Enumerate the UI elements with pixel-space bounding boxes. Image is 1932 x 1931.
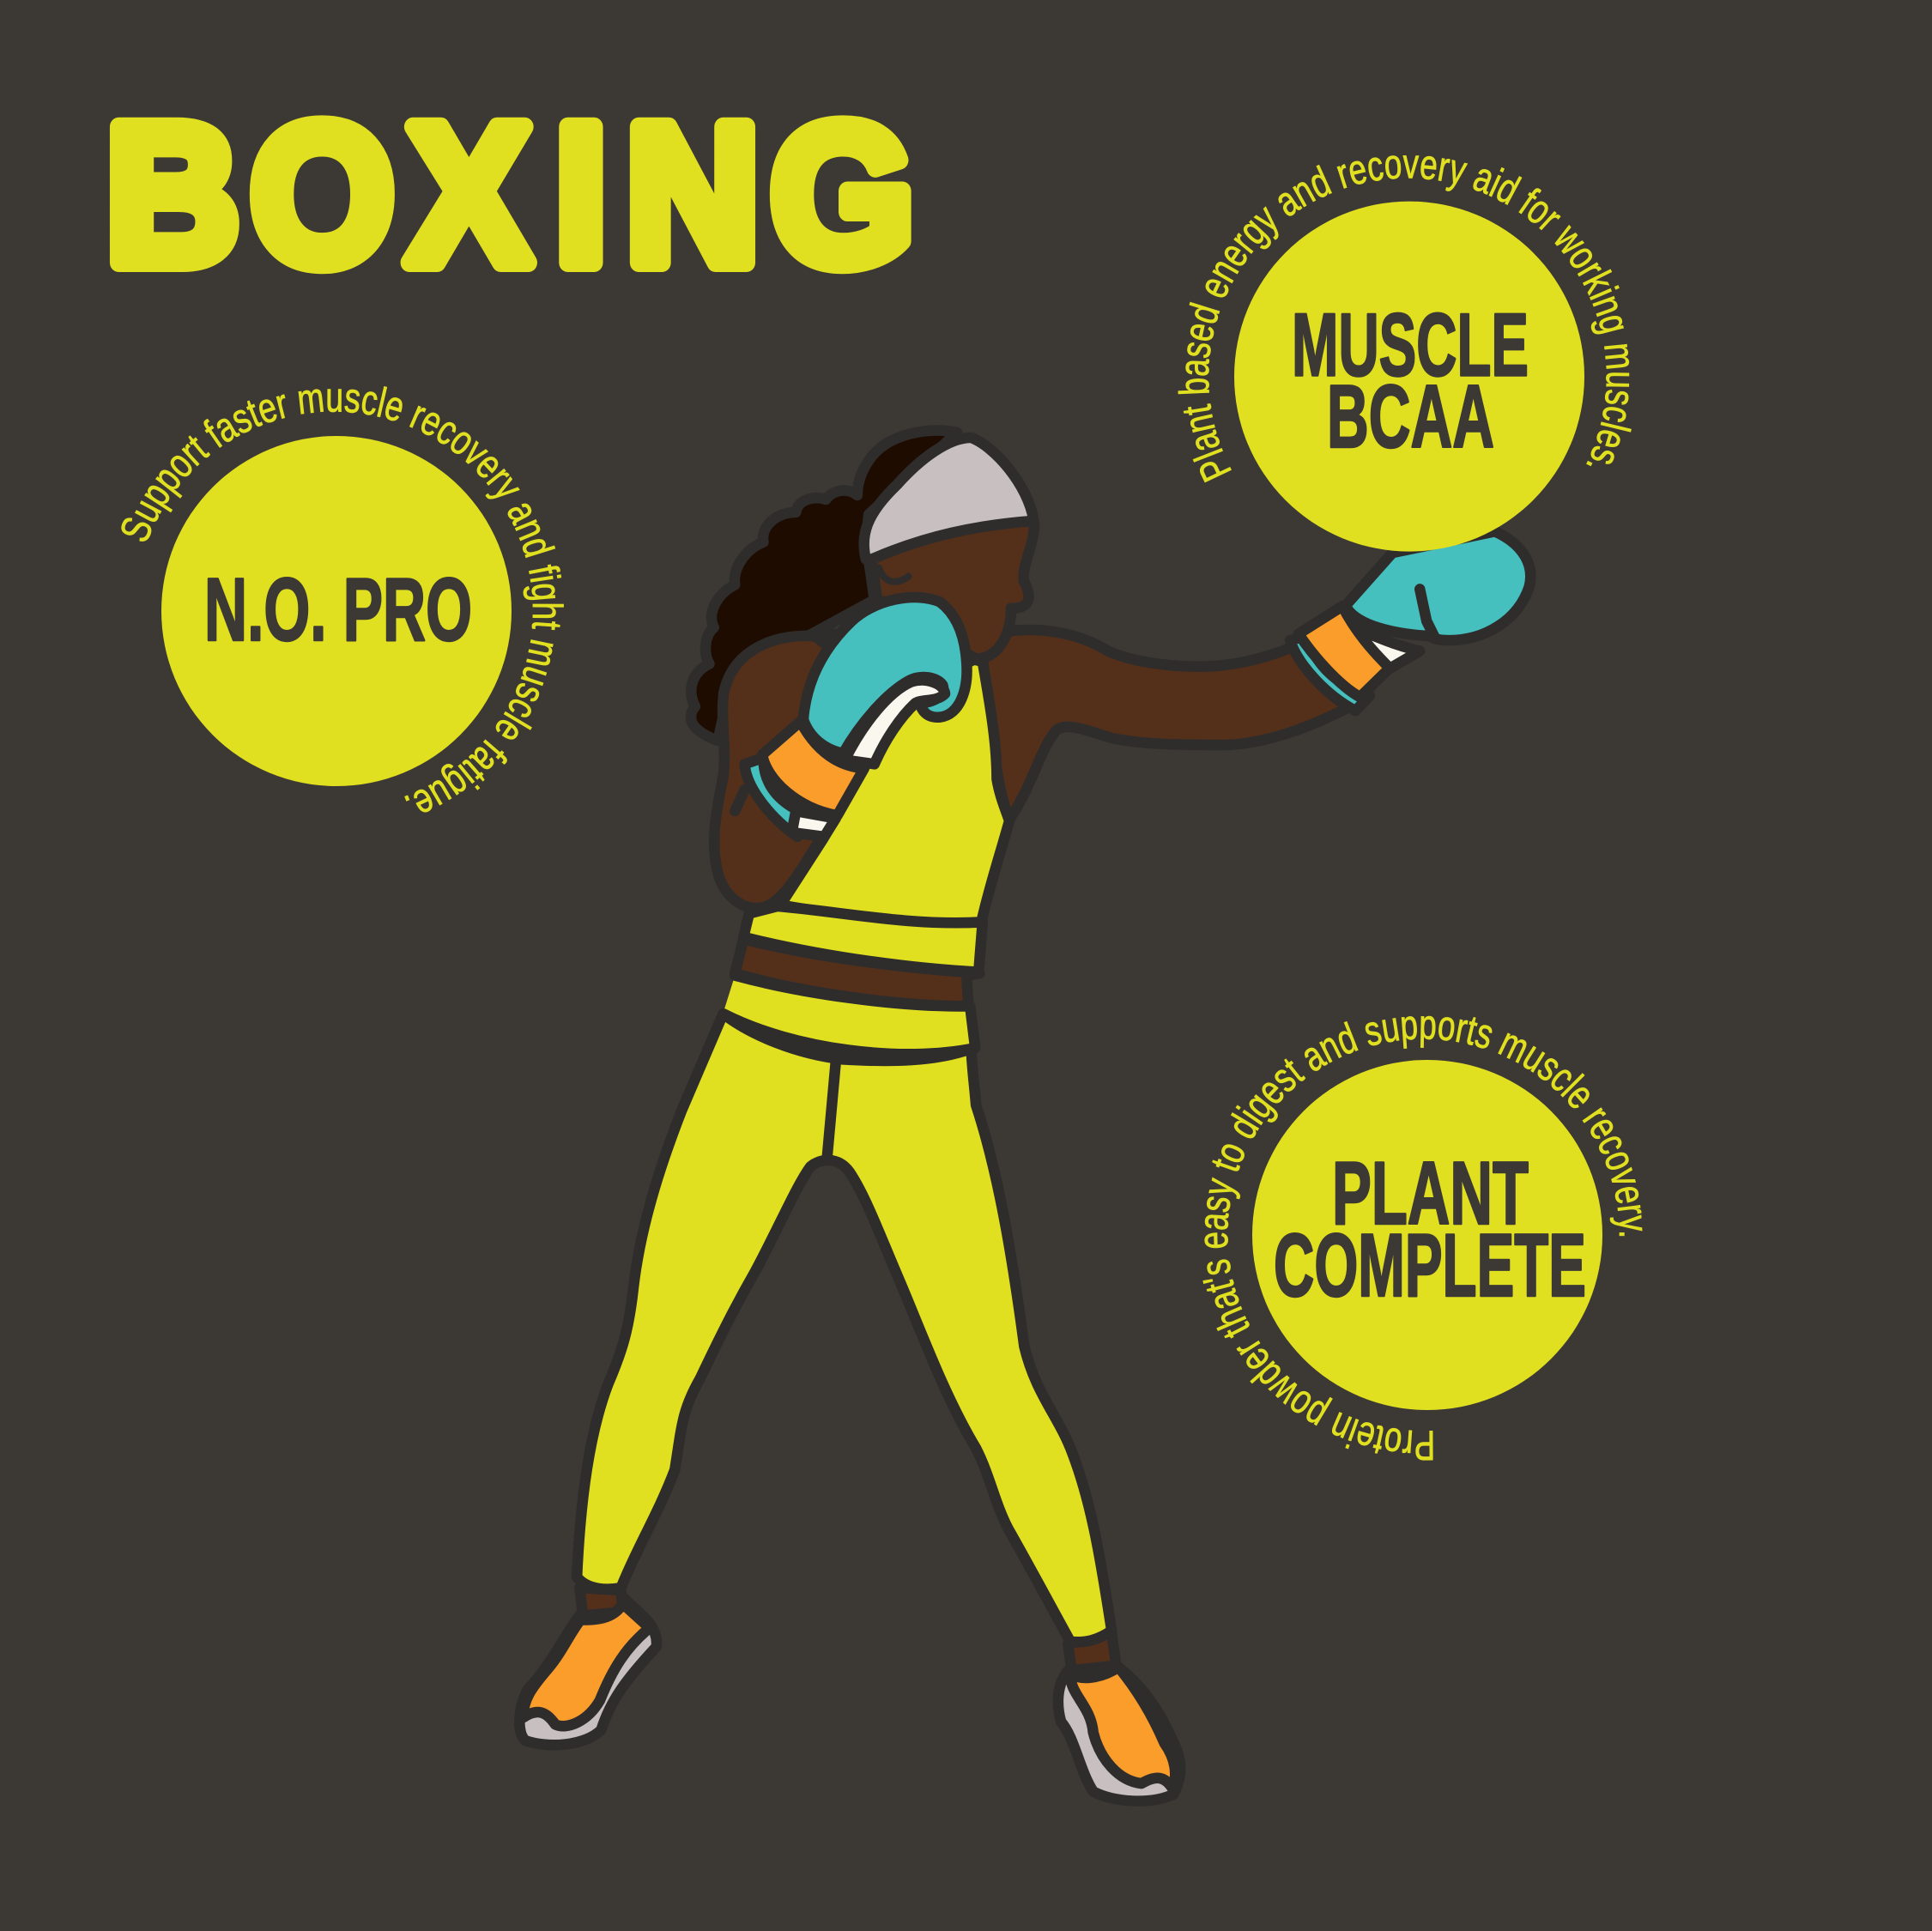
leggings seam [827,1062,836,1159]
hair [691,430,957,741]
tank top [780,659,1009,925]
face and neck [871,521,1034,658]
arm crease [735,790,745,811]
circular caption: Support faster muscle recovery and fight muscle fatigue. [121,386,564,812]
right shoe upper [1070,1667,1175,1789]
badge label line 1: PLANT [1332,1144,1529,1244]
badge circle [161,436,512,786]
illustration: boxer [519,430,1530,1801]
waistband outline [724,976,975,1054]
badge label: N.O. PRO [204,560,472,660]
right ankle [1068,1633,1117,1676]
tank top sliver [816,634,834,653]
left glove cuff [762,722,864,815]
circular caption: Plant based energy and recovery aid for working muscles. [1178,155,1632,482]
badge: Plant Complete [1202,1016,1643,1461]
ear [879,568,909,582]
badge: N.O. PRO [121,386,564,812]
left shoe sole [519,1598,657,1745]
title: BOXING [106,85,914,306]
badge label line 1: MUSCLE [1292,296,1529,396]
right glove white cuff [1353,627,1420,670]
right shoe sole [1058,1666,1180,1801]
midriff [735,939,979,1006]
right glove strap [1290,636,1370,711]
left glove [745,597,966,837]
left glove body [803,597,966,754]
right glove [1290,531,1530,711]
left glove strap [745,758,815,837]
badge: Muscle BCAA [1178,155,1632,552]
right glove body [1347,531,1530,640]
waistband [724,976,972,1053]
circular caption: Protein powder that's easy to digest and supports muscle recovery. [1202,1016,1643,1461]
boxer legs and shoes [519,1014,1180,1801]
left glove cuff white [792,811,836,837]
left ankle [579,1588,623,1615]
badge circle [1252,1060,1602,1410]
left shoe upper [523,1604,650,1726]
bent arm [714,636,857,908]
extended arm [983,630,1359,820]
right glove cuff [1299,606,1390,697]
boxer torso and arms [691,430,1530,1054]
headband [864,438,1034,560]
leggings [577,1014,1111,1642]
tank top hem [743,906,983,972]
badge label line 2: BCAA [1327,367,1494,467]
badge label line 2: COMPLETE [1274,1216,1586,1316]
right glove thumb line [1420,589,1435,639]
badge circle [1234,202,1584,552]
left glove thumb highlight [845,681,945,764]
